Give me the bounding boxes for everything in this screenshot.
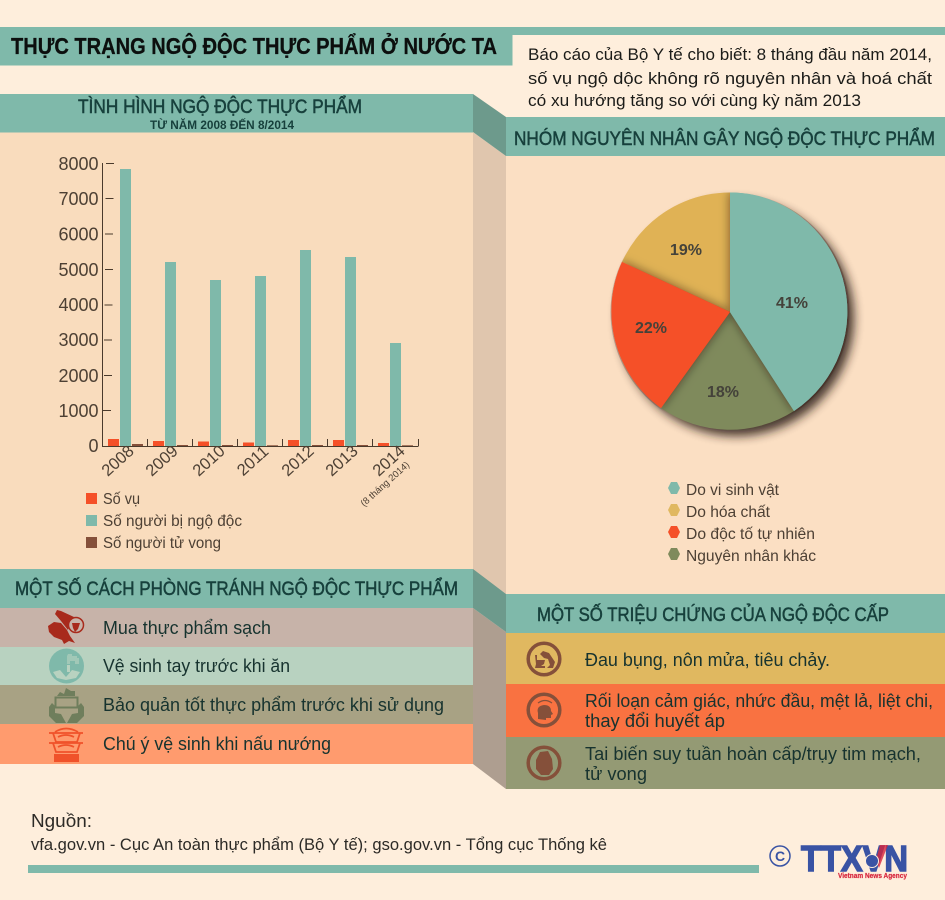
row: hygienic cooking bbox=[0, 724, 473, 764]
bar chart: 2011 bbox=[234, 442, 272, 480]
icon: steamer pot bbox=[49, 728, 83, 762]
bar chart: 0 bbox=[88, 436, 98, 456]
row: buy clean food bbox=[0, 608, 473, 647]
title: THỰC TRẠNG NGỘ ĐỘC THỰC PHẨM Ở NƯỚC TA bbox=[11, 31, 497, 59]
intro text block: Báo cáo của Bộ Y tế cho biết: 8 tháng đầu năm 2014, bbox=[528, 45, 932, 64]
panel: prevention bbox=[0, 569, 506, 789]
pie chart: 41% bbox=[776, 295, 808, 312]
chart legend: Số vụ bbox=[103, 491, 140, 508]
bar chart: 4000 bbox=[58, 295, 98, 315]
bar chart: 5000 bbox=[58, 260, 98, 280]
bar chart: 2000 bbox=[58, 366, 98, 386]
icon: heart bbox=[528, 747, 560, 779]
bar chart: 1000 bbox=[58, 401, 98, 421]
chart legend: Số người tử vong bbox=[103, 535, 221, 552]
panel: symptoms bbox=[506, 594, 945, 789]
pie chart: 19% bbox=[670, 242, 702, 259]
title bbox=[0, 27, 512, 66]
intro text block: có xu hướng tăng so với cùng kỳ năm 2013 bbox=[528, 91, 861, 110]
bar chart: 2009 bbox=[142, 442, 182, 480]
row: stomach symptoms: Đau bụng, nôn mửa, tiêu chảy. bbox=[585, 650, 830, 670]
bar chart: 3000 bbox=[58, 330, 98, 350]
icon: water tap and hands bbox=[49, 648, 84, 684]
row: wash hands: Vệ sinh tay trước khi ăn bbox=[103, 656, 290, 676]
bar chart: 2012 bbox=[278, 442, 318, 480]
row: store food bbox=[0, 685, 473, 724]
row: circulatory symptoms: Tai biến suy tuần hoàn cấp/trụy tim mạch, bbox=[585, 744, 921, 764]
row: wash hands bbox=[0, 647, 473, 685]
icon: head with dizziness bbox=[528, 694, 560, 726]
row: buy clean food: Mua thực phẩm sạch bbox=[103, 618, 271, 638]
bar chart: 2014 bbox=[369, 442, 409, 480]
bar chart: (8 tháng 2014) bbox=[359, 460, 412, 509]
bar chart: 2010 bbox=[189, 442, 229, 480]
row: nervous symptoms bbox=[506, 684, 945, 737]
chart legend: Số người bị ngộ độc bbox=[103, 513, 242, 530]
source text: vfa.gov.vn - Cục An toàn thực phẩm (Bộ Y tế); gso.gov.vn - Tổng cục Thống kê bbox=[31, 835, 607, 854]
pie legend: Do hóa chất bbox=[686, 504, 771, 521]
panel: food poisoning situation bbox=[0, 94, 506, 594]
pie chart bbox=[611, 192, 854, 436]
row: stomach symptoms bbox=[506, 633, 945, 684]
pie legend bbox=[668, 482, 816, 565]
icon: fish and meat bbox=[48, 610, 84, 644]
icon: hands holding box bbox=[49, 688, 84, 723]
heading: prevention: MỘT SỐ CÁCH PHÒNG TRÁNH NGỘ ĐỘC THỰC PHẨM bbox=[15, 578, 458, 600]
heading: situation bbox=[0, 94, 473, 132]
heading: causes bbox=[506, 117, 945, 156]
chart legend bbox=[86, 491, 242, 552]
row: hygienic cooking: Chú ý vệ sinh khi nấu nướng bbox=[103, 734, 331, 754]
heading: symptoms: MỘT SỐ TRIỆU CHỨNG CỦA NGỘ ĐỘC CẤP bbox=[537, 604, 889, 626]
logo: TTXVN: Vietnam News Agency bbox=[838, 871, 908, 880]
pie chart: 22% bbox=[635, 320, 667, 337]
heading: prevention bbox=[0, 569, 473, 608]
pie legend: Do độc tố tự nhiên bbox=[686, 526, 815, 543]
logo: TTXVN: TTXVN bbox=[801, 838, 908, 879]
heading: situation: TÌNH HÌNH NGỘ ĐỘC THỰC PHẨM bbox=[78, 96, 362, 118]
panel: causes bbox=[506, 117, 945, 594]
source text: Nguồn: bbox=[31, 811, 92, 831]
pie legend: Nguyên nhân khác bbox=[686, 548, 816, 565]
icon: person vomiting bbox=[528, 643, 560, 675]
bar chart bbox=[58, 154, 418, 509]
intro text block: số vụ ngộ dộc không rõ nguyên nhân và hoá chất bbox=[528, 69, 932, 88]
bar chart: 8000 bbox=[58, 154, 98, 174]
row: circulatory symptoms: tử vong bbox=[585, 764, 647, 784]
pie chart: 18% bbox=[707, 384, 739, 401]
row: circulatory symptoms bbox=[506, 737, 945, 789]
footer bar bbox=[28, 865, 759, 873]
bar chart: 7000 bbox=[58, 189, 98, 209]
bar chart: 2008 bbox=[98, 442, 138, 480]
row: nervous symptoms: thay đổi huyết áp bbox=[585, 711, 725, 731]
pie legend: Do vi sinh vật bbox=[686, 482, 780, 499]
heading: symptoms bbox=[506, 594, 945, 633]
intro text block bbox=[512, 27, 945, 110]
row: nervous symptoms: Rối loạn cảm giác, nhức đầu, mệt lả, liệt chi, bbox=[585, 691, 933, 711]
bar chart: 6000 bbox=[58, 224, 98, 244]
bar chart: 2013 bbox=[322, 442, 362, 480]
source text bbox=[31, 811, 607, 854]
row: store food: Bảo quản tốt thực phẩm trước khi sử dụng bbox=[103, 695, 444, 715]
logo: TTXVN: C bbox=[775, 848, 785, 864]
heading: situation: TỪ NĂM 2008 ĐẾN 8/2014 bbox=[150, 117, 294, 132]
